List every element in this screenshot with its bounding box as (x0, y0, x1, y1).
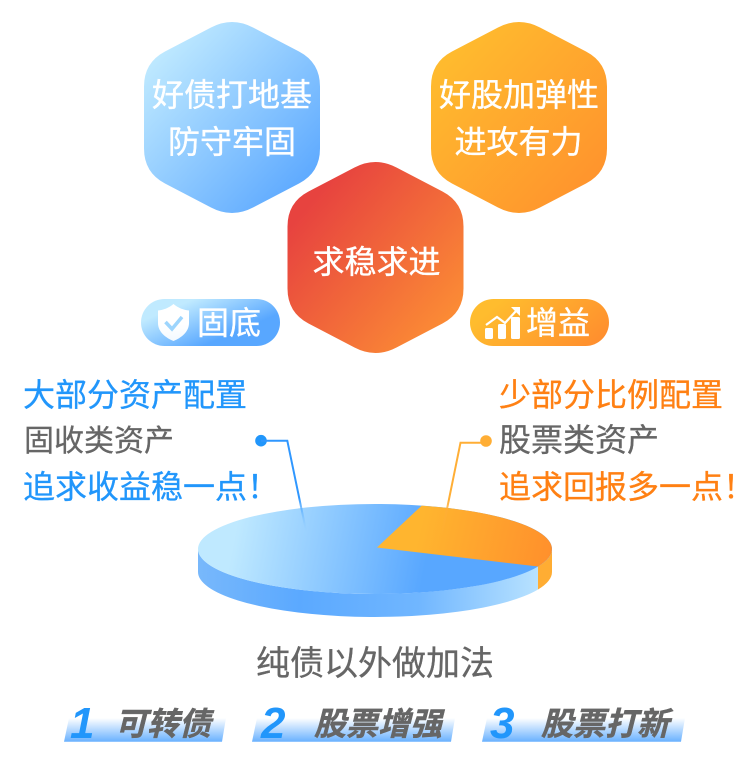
heading: 纯债以外做加法: 纯债以外做加法 (256, 645, 494, 683)
banner: 3 股票打新: 3 (490, 699, 514, 748)
hexagon: 求稳求进 (288, 162, 464, 353)
leader line: blue (255, 435, 307, 534)
pie top: orange share (377, 506, 552, 566)
hexagon: 好股加弹性 进攻有力 (431, 22, 607, 213)
hexagon: 好股加弹性 进攻有力: 进攻有力 (454, 124, 583, 160)
pie chart: 3D allocation (198, 504, 552, 617)
icon: shield check (158, 304, 189, 341)
banner: 2 股票增强: 股票增强 (314, 706, 445, 742)
hexagon: 好债打地基 防守牢固 (144, 22, 320, 213)
banner: 1 可转债: 可转债 (115, 706, 215, 742)
text block: 少部分比例配置 (499, 377, 750, 505)
banner: 1 可转债: 1 (70, 699, 94, 748)
pie top: blue share (198, 504, 552, 594)
pie side: orange (538, 549, 552, 590)
text block: 大部分资产配置: 固收类资产 (24, 425, 174, 458)
pill: 增益 (470, 299, 609, 346)
text block: 少部分比例配置: 追求回报多一点！ (499, 469, 750, 505)
text block: 大部分资产配置 (23, 377, 279, 505)
hexagon: 好股加弹性 进攻有力: 好股加弹性 (439, 77, 599, 113)
banner: 3 股票打新: 股票打新 (541, 706, 674, 742)
text block: 大部分资产配置: 追求收益稳一点！ (23, 469, 279, 505)
banner: 1 可转债 (64, 699, 226, 748)
text block: 少部分比例配置: 少部分比例配置 (499, 377, 723, 413)
banner: 2 股票增强 (252, 699, 455, 748)
hexagon: 好债打地基 防守牢固: 好债打地基 (152, 77, 312, 113)
leader line: orange (442, 435, 492, 536)
icon: rising bar chart (485, 307, 520, 339)
pill: 固底: 固底 (197, 305, 261, 341)
pie side: blue (198, 549, 538, 617)
pill: 增益: 增益 (526, 305, 590, 341)
hexagon: 好债打地基 防守牢固: 防守牢固 (168, 124, 296, 160)
text block: 大部分资产配置: 大部分资产配置 (23, 377, 247, 413)
banner: 3 股票打新 (482, 699, 685, 748)
text block: 少部分比例配置: 股票类资产 (499, 422, 659, 458)
pill: 固底 (141, 299, 280, 346)
hexagon: 求稳求进: 求稳求进 (312, 244, 441, 280)
banner: 2 股票增强: 2 (260, 699, 286, 748)
